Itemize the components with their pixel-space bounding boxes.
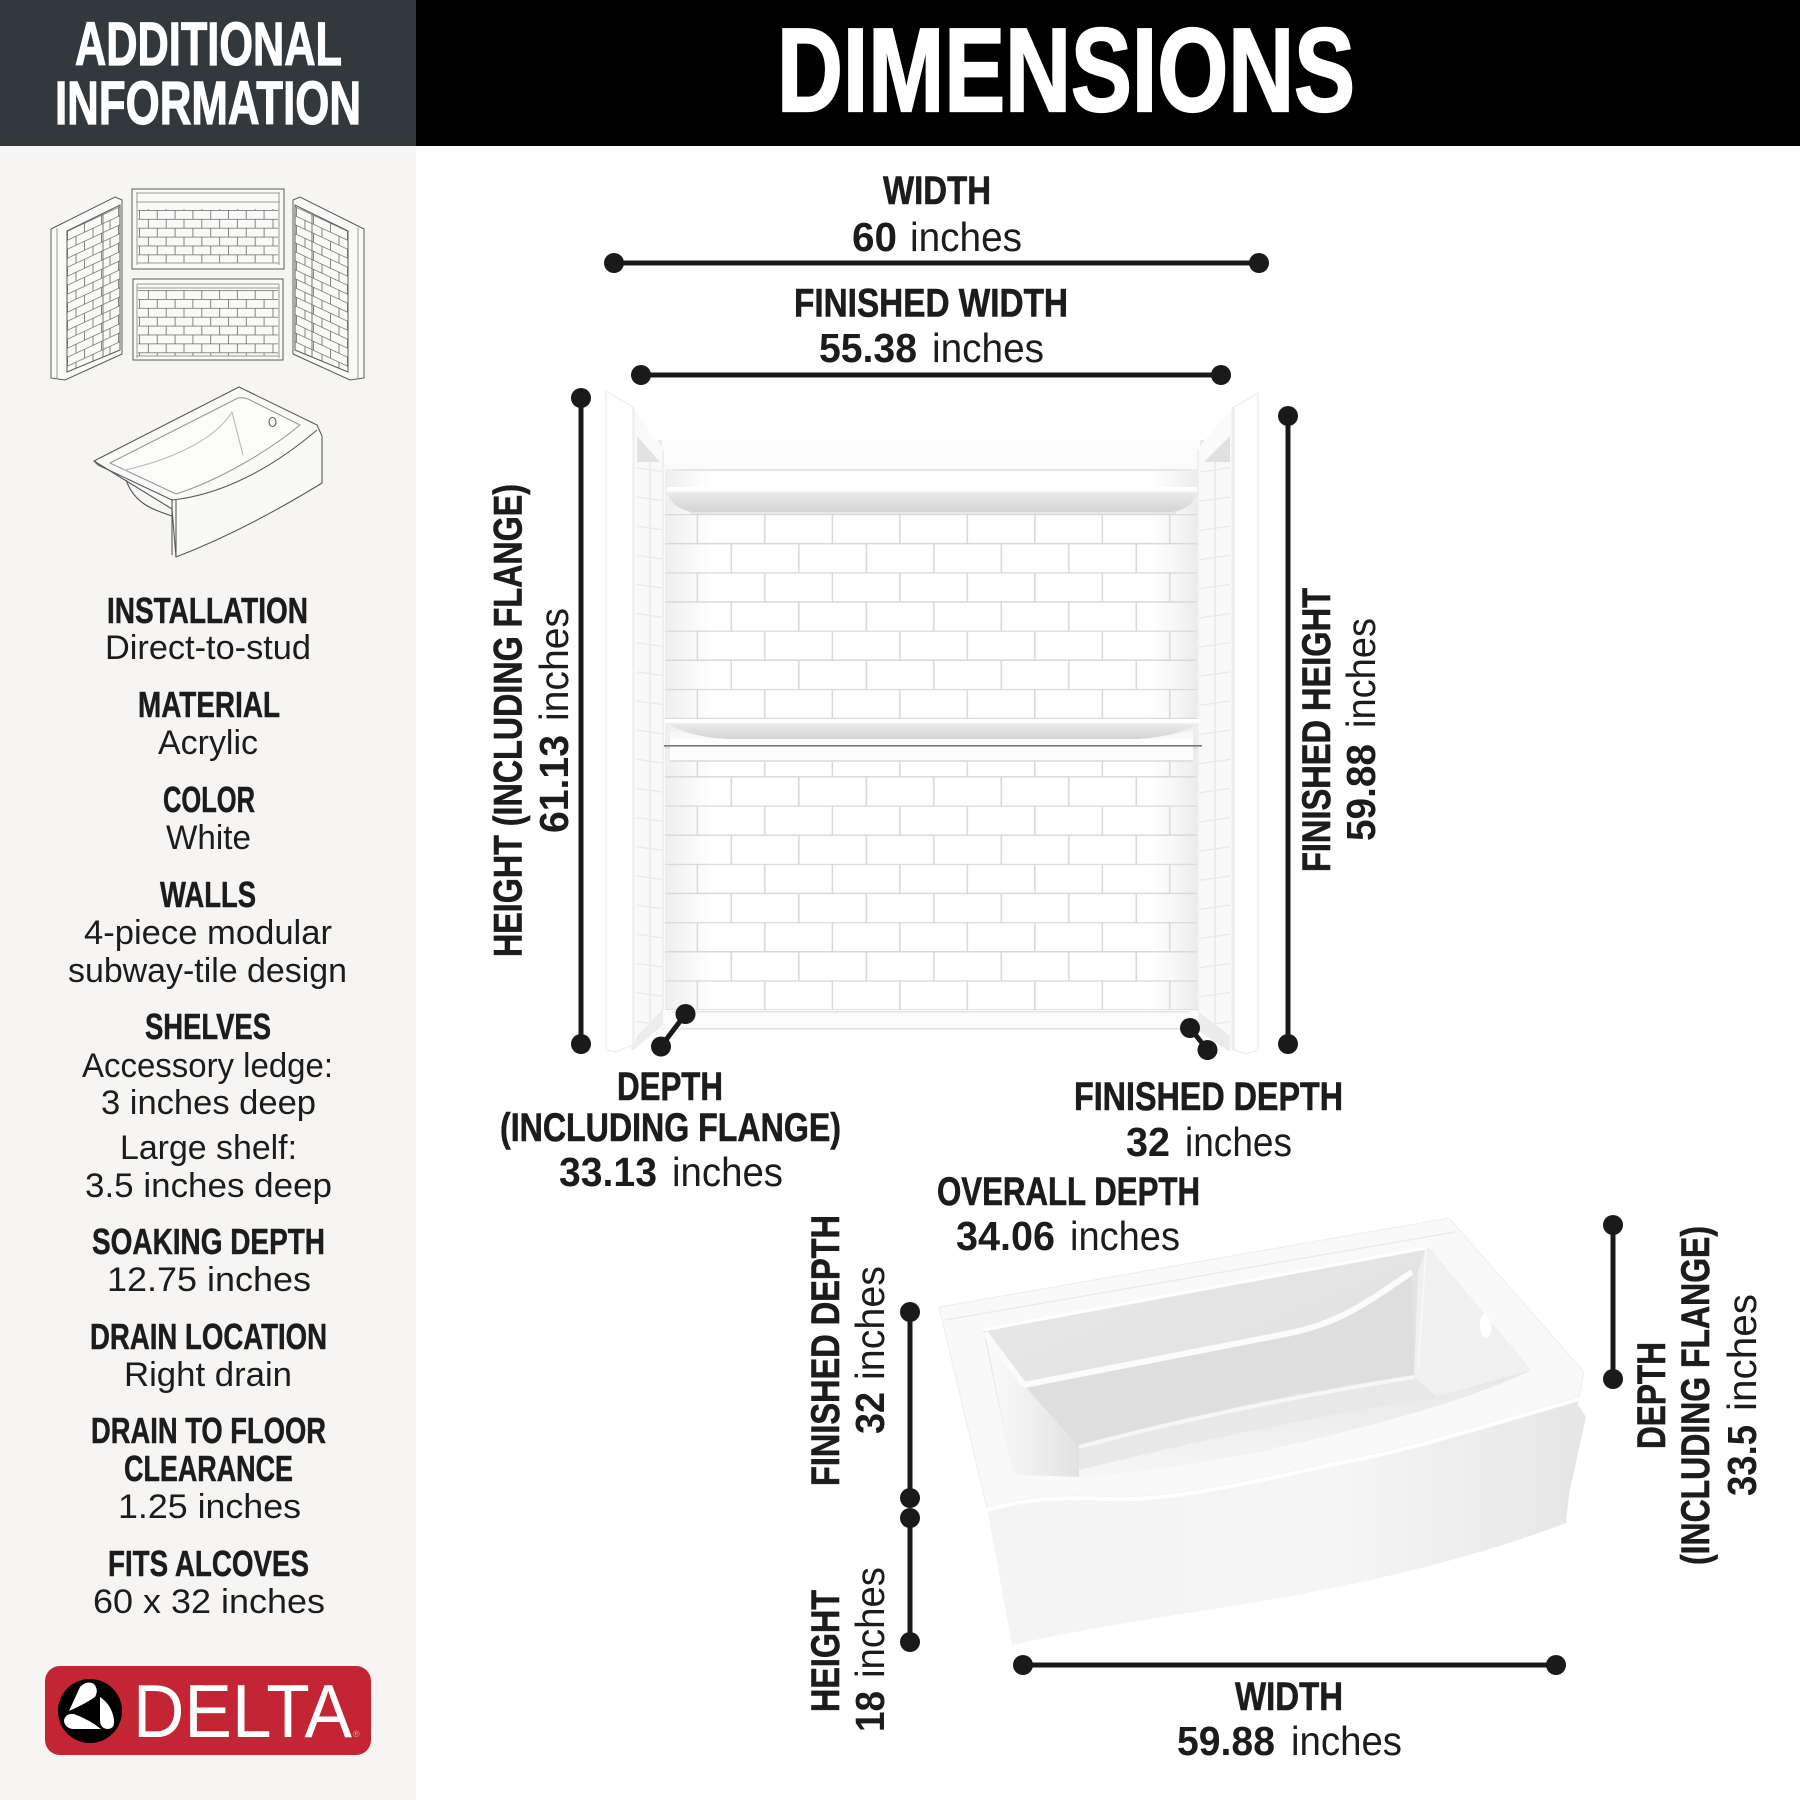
spec: fits alcoves <box>93 1543 325 1621</box>
left side wall <box>633 407 665 1050</box>
arrow: tub width line <box>1013 1655 1566 1675</box>
dimension: depth including flange 33.13 inches: DEPTH <box>617 1065 723 1109</box>
spec: material: MATERIAL <box>138 684 280 725</box>
spec: shelves: Large shelf: <box>120 1129 297 1167</box>
spec: shelves <box>82 1006 333 1205</box>
right side wall <box>1197 407 1234 1052</box>
spec: soaking depth <box>92 1221 325 1299</box>
arrow: width line <box>604 253 1269 273</box>
large shelf <box>664 719 1202 762</box>
sidebar heading: additional information <box>0 0 416 146</box>
dimension: finished width 55.38 inches <box>631 282 1231 385</box>
dimension: tub width 59.88 inches <box>1013 1655 1566 1764</box>
dimension: finished height 59.88 inches: FINISHED HEIGHT <box>1295 588 1339 872</box>
page title banner: dimensions <box>416 0 1800 146</box>
tub right flange <box>1563 1403 1586 1522</box>
page title banner: dimensions: DIMENSIONS <box>777 4 1355 137</box>
dimension: tub finished depth 32 inches: FINISHED DEPTH <box>804 1215 848 1486</box>
wall panel: right <box>293 197 364 380</box>
dimension: finished height 59.88 inches: 59.88 <box>1338 744 1384 841</box>
arrow: tub depth line <box>1603 1215 1623 1389</box>
spec: material: Acrylic <box>158 724 258 762</box>
dimension: tub width 59.88 inches: 59.88 <box>1177 1718 1275 1764</box>
dimension: finished width 55.38 inches: 55.38 <box>819 325 917 371</box>
spec: color <box>163 779 255 857</box>
spec: drain to floor clearance: 1.25 inches <box>118 1488 301 1526</box>
wall panel: top center <box>132 189 284 269</box>
dimension: tub finished depth 32 inches: 32 <box>847 1392 893 1434</box>
panel: additional information sidebar <box>0 0 416 1800</box>
spec: fits alcoves: FITS ALCOVES <box>108 1543 309 1584</box>
dimension: tub finished depth 32 inches <box>804 1215 920 1508</box>
dimension: finished depth 32 inches: FINISHED DEPTH <box>1074 1075 1343 1119</box>
spec: shelves: SHELVES <box>145 1006 271 1047</box>
dimension: tub width 59.88 inches: WIDTH <box>1235 1675 1343 1719</box>
dimension: tub height 18 inches: inches <box>847 1567 893 1678</box>
logo: Delta: ® <box>353 1729 360 1739</box>
dimension: height including flange 61.13 inches: 61.13 <box>531 735 577 833</box>
dimension: finished depth 32 inches <box>1074 1018 1343 1165</box>
dimension: tub depth including flange 33.5 inches <box>1603 1215 1765 1565</box>
dimension: tub height 18 inches: HEIGHT <box>804 1590 848 1712</box>
arrow: finished height line <box>1278 406 1298 1054</box>
spec: shelves: 3.5 inches deep <box>85 1167 332 1205</box>
spec: material <box>138 684 280 762</box>
spec: drain to floor clearance <box>91 1410 326 1526</box>
spec: drain location: DRAIN LOCATION <box>90 1316 327 1357</box>
dimension: width 60 inches <box>604 169 1269 273</box>
dimension: width 60 inches: inches <box>910 214 1022 260</box>
dimension: tub depth including flange 33.5 inches: inches <box>1719 1294 1765 1411</box>
spec: drain to floor clearance: DRAIN TO FLOOR <box>91 1410 326 1451</box>
logo: Delta <box>45 1666 371 1755</box>
tub basin <box>983 1248 1531 1477</box>
spec: drain to floor clearance: CLEARANCE <box>124 1448 293 1489</box>
sidebar heading: additional information: INFORMATION <box>55 69 361 137</box>
spec: walls: 4-piece modular <box>84 914 332 952</box>
dimension: overall depth 34.06 inches <box>937 1170 1200 1259</box>
arrow: depth marker <box>651 1004 696 1056</box>
spec: installation <box>105 590 311 667</box>
dimension: finished height 59.88 inches <box>1278 406 1384 1054</box>
dimension: tub depth including flange 33.5 inches: (INCLUDING FLANGE) <box>1674 1226 1718 1565</box>
arrow: height line <box>571 388 591 1054</box>
left flange <box>606 391 633 1052</box>
dimension: tub height 18 inches: 18 <box>847 1691 893 1732</box>
spec: installation: INSTALLATION <box>107 590 308 631</box>
dimension: tub width 59.88 inches: inches <box>1291 1718 1402 1764</box>
dimension: height including flange 61.13 inches: HEIGHT (INCLUDING FLANGE) <box>486 484 530 957</box>
spec: fits alcoves: 60 x 32 inches <box>93 1583 325 1621</box>
dimension: tub depth including flange 33.5 inches: 33.5 <box>1719 1425 1765 1496</box>
dimension: tub height 18 inches <box>804 1508 920 1732</box>
dimension: overall depth 34.06 inches: OVERALL DEPTH <box>937 1170 1200 1214</box>
spec: drain location: Right drain <box>124 1356 292 1394</box>
dimension: finished depth 32 inches: 32 <box>1126 1119 1170 1165</box>
spec: soaking depth: 12.75 inches <box>107 1261 311 1299</box>
spec: color: White <box>166 819 251 857</box>
dimension: depth including flange 33.13 inches: 33.13 <box>559 1149 657 1195</box>
arrow: finished width line <box>631 365 1231 385</box>
dimension: width 60 inches: 60 <box>852 214 897 260</box>
tub overflow drain <box>1479 1313 1492 1339</box>
spec: installation: Direct-to-stud <box>105 629 311 667</box>
logo: Delta: DELTA <box>133 1669 352 1753</box>
arrow: tub finished depth line <box>900 1302 920 1508</box>
spec: walls: subway-tile design <box>68 952 347 990</box>
dimension: tub finished depth 32 inches: inches <box>847 1266 893 1380</box>
tub front skirt <box>987 1397 1579 1645</box>
arrow: finished depth marker <box>1180 1018 1218 1060</box>
bathtub product image <box>939 1218 1586 1645</box>
spec: drain location <box>90 1316 327 1394</box>
dimension: depth including flange 33.13 inches <box>500 1004 841 1195</box>
spec: walls <box>68 874 347 990</box>
dimension: height including flange 61.13 inches: inches <box>531 608 577 721</box>
dimension: tub depth including flange 33.5 inches: DEPTH <box>1630 1342 1674 1449</box>
dimension: finished width 55.38 inches: inches <box>932 325 1044 371</box>
back wall with subway tile <box>658 440 1204 1030</box>
spec: shelves: 3 inches deep <box>101 1084 316 1122</box>
dimension: depth including flange 33.13 inches: (INCLUDING FLANGE) <box>500 1106 841 1150</box>
dimension: finished depth 32 inches: inches <box>1185 1119 1292 1165</box>
icon: bathtub line drawing <box>94 387 322 557</box>
top accessory ledge <box>667 487 1197 513</box>
arrow: tub height line <box>900 1508 920 1652</box>
spec: shelves: Accessory ledge: <box>82 1047 333 1085</box>
dimension: depth including flange 33.13 inches: inches <box>672 1149 783 1195</box>
spec: color: COLOR <box>163 779 255 820</box>
dimension: overall depth 34.06 inches: inches <box>1070 1213 1180 1259</box>
dimension: finished height 59.88 inches: inches <box>1338 618 1384 728</box>
tub rim <box>939 1218 1584 1508</box>
spec: walls: WALLS <box>160 874 256 915</box>
dimension: width 60 inches: WIDTH <box>883 169 991 213</box>
icon: four wall panels line drawing <box>51 189 364 380</box>
sidebar heading: additional information: ADDITIONAL <box>75 10 342 78</box>
right flange <box>1234 393 1258 1054</box>
dimension: finished width 55.38 inches: FINISHED WIDTH <box>794 282 1068 326</box>
spec: soaking depth: SOAKING DEPTH <box>92 1221 325 1262</box>
wall panel: left <box>51 197 122 380</box>
wall panel: bottom center <box>133 279 283 360</box>
dimension: height including flange 61.13 inches <box>486 388 591 1054</box>
dimension: overall depth 34.06 inches: 34.06 <box>956 1213 1055 1259</box>
shower wall product image <box>606 391 1258 1054</box>
